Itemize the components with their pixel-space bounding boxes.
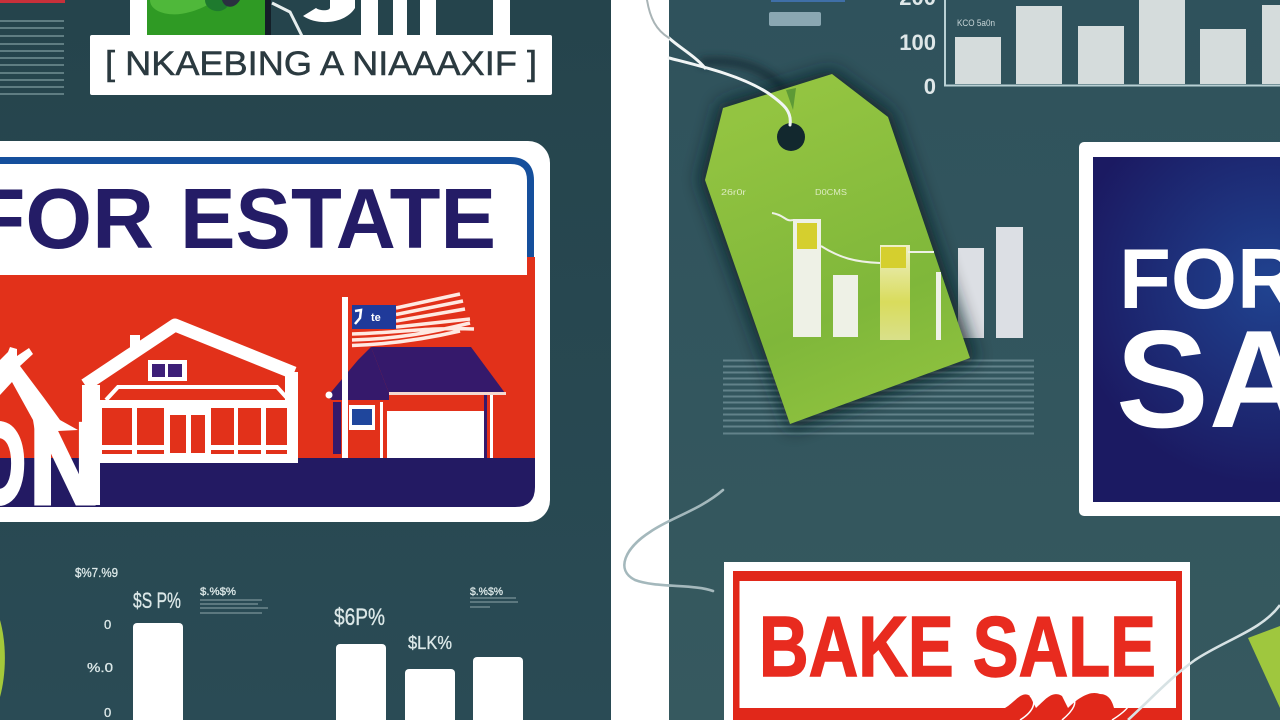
white house illustration [82,325,298,505]
tag hole [777,123,805,151]
sign headline [0,172,496,267]
main estate sign [0,141,550,528]
small bar label: KCO 5a0n [957,18,995,28]
red bunting [1000,693,1130,720]
left panel background [0,0,611,720]
chart caption micro lines [200,598,518,613]
bake sale sign [724,562,1190,720]
striped text lines under tag [723,360,1034,434]
chart value labels: 0 [104,705,111,720]
flagpole and flag: te [371,312,381,324]
tag chart labels: D0CMS [815,188,847,197]
navy panel [1093,157,1280,502]
axis labels: 100 [899,30,936,55]
bars behind tag [958,227,1023,338]
tag chart labels: 26r0r [721,188,746,197]
top-left red bar and text lines [0,0,65,94]
chart bars [133,623,523,720]
axis labels: 0 [924,74,936,99]
attic window [148,360,187,381]
top sign fragment with green picture [130,0,510,36]
for sale sign [1079,142,1280,516]
right panel background [669,0,1280,720]
bake sale text: BAKE SALE [759,600,1156,695]
red band [0,257,535,458]
top-right bar chart [899,0,1280,99]
green price tag [700,70,976,430]
navy ground band [0,458,535,507]
loose string at left of bake sale [624,490,723,591]
tag chart [721,188,941,340]
chart value labels: 0 [104,617,111,632]
navy-roof garage house [327,347,506,458]
chart value labels: $S P% [133,588,181,613]
letters and broken roof at left of sign [0,347,100,528]
for sale text [1116,232,1280,457]
bottom-left bar chart [75,565,523,720]
white centre divider [611,0,669,720]
tag string [647,0,790,125]
chart axis [945,0,1280,86]
chart value labels: %.0 [87,660,113,675]
heading label box [90,35,552,95]
red border [733,571,1182,720]
flagpole and flag [326,294,474,458]
letters and broken roof at left of sign: N [30,401,100,528]
green tag fragment at bottom left [0,620,5,697]
chart value labels: $LK% [408,633,452,653]
green tag corner [1248,626,1280,708]
chart value labels: $%7.%9 [75,565,118,580]
axis labels [899,0,936,99]
second tag string [1128,605,1280,720]
tag shape [705,74,970,424]
sign headline: ESTATE [180,172,496,267]
string shadow [700,61,790,100]
tag shadow [700,70,976,430]
tag chart labels [721,188,847,197]
chart value labels: $6P% [334,604,385,631]
chart value labels: $.%$% [470,586,503,598]
chart value labels: $.%$% [200,586,236,598]
heading text: [ NKAEBING A NIAAAXIF ] [105,45,537,83]
top-right legend swatches [769,0,845,26]
bars [955,0,1280,84]
chart value labels [75,565,503,720]
